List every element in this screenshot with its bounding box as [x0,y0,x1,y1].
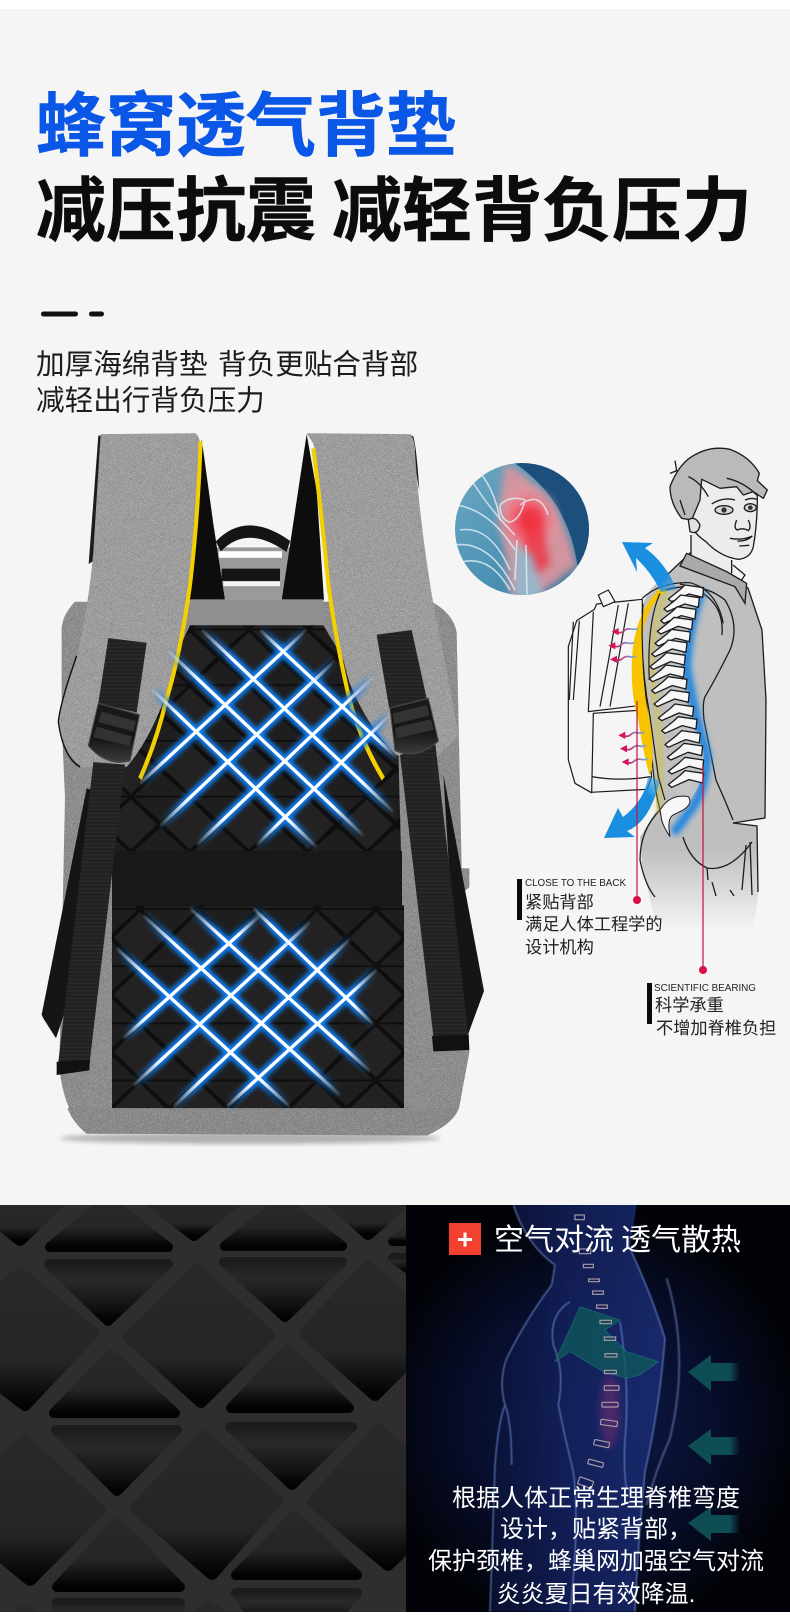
title line 1: 蜂窝透气背垫 [36,87,456,165]
paragraph line 4: 炎炎夏日有效降温. [497,1581,695,1608]
left shoulder strap [58,433,201,767]
shoulder x-ray circle [455,463,589,595]
airflow grid lines [117,630,397,1107]
heading part 1: 空气对流 [494,1224,614,1257]
spine and backpack [568,583,723,837]
title [36,87,752,250]
panel heading [494,1224,741,1257]
left strap webbing [57,638,147,1075]
plus badge [449,1223,481,1255]
honeycomb back pad upper [113,625,401,852]
callout line 2: 满足人体工程学的 [525,914,663,934]
human torso figure [490,1205,679,1612]
callout: close to the back [517,878,663,957]
heat arrows [608,628,648,766]
yellow-green glow [652,590,667,813]
paragraph line 3: 保护颈椎，蜂巢网加强空气对流 [428,1548,764,1575]
airflow grid glow [117,630,397,1107]
figure body [640,553,766,930]
figure outlines [640,553,766,897]
callout english: SCIENTIFIC BEARING [654,983,756,994]
callout: scientific bearing [647,983,776,1038]
yellow padding left [140,441,201,779]
backpack outline [568,590,652,793]
bag bottom band [67,1108,458,1135]
torso highlights [490,1205,665,1612]
background [0,9,790,1205]
strap edge line [58,656,80,767]
upper triangles [50,1200,410,1587]
lower blue arrow [604,777,660,838]
rear straps [42,774,484,1038]
callout line 3: 设计机构 [525,937,594,957]
callout english: CLOSE TO THE BACK [525,878,626,889]
blue glow along spine [673,590,707,833]
horizontal strap [112,851,402,906]
shoulder strap outer edges [89,434,419,564]
right arrows [688,1355,740,1541]
head [670,448,767,603]
left buckle [88,703,139,762]
subtitle text [36,349,418,417]
callout line 2: 不增加脊椎负担 [656,1018,776,1038]
subtitle line 1: 加厚海绵背垫 [36,349,208,381]
honeycomb back pad lower [112,905,404,1108]
title line 2 left: 减压抗震 [36,172,316,250]
upper blue arrow [622,542,677,592]
subtitle line 1b: 背负更贴合背部 [218,349,418,381]
panel: pad close-up [0,1205,406,1612]
callout line 1: 紧贴背部 [525,892,594,912]
subtitle line 2: 减轻出行背负压力 [36,385,265,417]
paragraph line 1: 根据人体正常生理脊椎弯度 [452,1485,740,1512]
red leader lines [633,701,707,974]
right buckle [390,698,438,754]
right shoulder strap [307,433,458,760]
big diamonds [0,1200,460,1620]
heading part 2: 透气散热 [621,1224,741,1257]
yellow padding right [313,448,383,779]
bag body [59,602,469,1135]
outer arc [647,1278,679,1505]
handle and mesh [189,434,324,627]
vertebrae [649,585,704,837]
yellow back pad [632,588,667,775]
backpack illustration [42,433,484,1146]
ground shadow [60,1133,440,1144]
right strap webbing [377,630,469,1051]
big teal arrow [555,1307,658,1378]
callout bar [517,879,522,920]
spine glow [601,1375,619,1448]
panel paragraph [428,1485,764,1608]
lower triangles [49,1258,410,1622]
side view diagram [455,448,768,974]
paragraph line 2: 设计，贴紧背部， [500,1516,692,1543]
panel: airflow body [406,1205,790,1612]
title line 2 right: 减轻背负压力 [332,172,752,250]
torso body [490,1205,665,1612]
dash marks [41,312,104,316]
spine rings [575,1215,619,1489]
back outline [642,583,723,800]
callout bar [647,983,652,1024]
spine backing [670,590,693,797]
callout line 1: 科学承重 [655,995,724,1015]
